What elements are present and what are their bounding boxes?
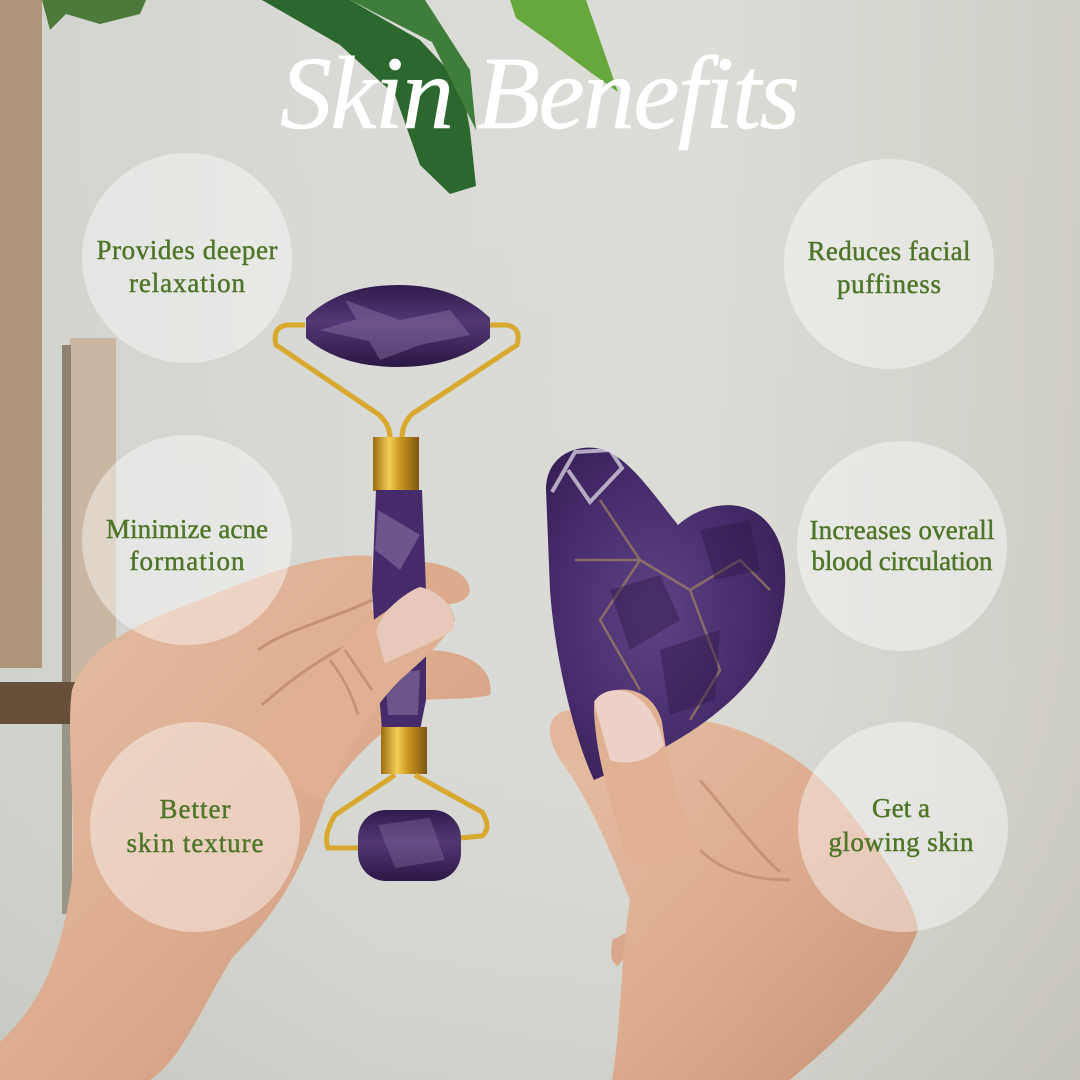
finger crease: [258, 600, 372, 705]
title: Skin Benefits: [280, 36, 800, 151]
benefit circle: Increases overall blood circulation: blood circulation: [812, 546, 993, 576]
wooden shelf: [0, 682, 76, 724]
benefit circle: Increases overall blood circulation: [797, 441, 1007, 651]
stone veins: [575, 500, 770, 720]
gua sha stone: [546, 448, 785, 866]
palm crease: [700, 780, 790, 880]
roller frame top: [275, 325, 518, 438]
right hand: [550, 690, 918, 1080]
index fingertip: [425, 562, 470, 605]
benefit circle: Better skin texture: Better: [160, 794, 230, 824]
palm and forearm: [0, 556, 491, 1080]
thumb over handle: [250, 593, 455, 800]
stone white band: [552, 450, 622, 502]
roller stone top: [306, 285, 490, 367]
thumb creases: [330, 650, 372, 715]
left hand: [0, 556, 491, 1080]
benefit circle: Get a glowing skin: glowing skin: [828, 827, 974, 857]
benefit circle: Provides deeper relaxation: relaxation: [129, 268, 246, 298]
benefit circle: Better skin texture: skin texture: [126, 828, 264, 858]
roller stone bottom: [358, 810, 461, 881]
foliage: [42, 0, 618, 194]
benefit circle: Minimize acne formation: Minimize acne: [106, 514, 268, 544]
collar top: [373, 437, 419, 491]
hand body: [560, 690, 918, 1080]
benefit circle: Reduces facial puffiness: puffiness: [837, 269, 941, 299]
benefit circle: Minimize acne formation: formation: [130, 546, 245, 576]
benefit circle: Provides deeper relaxation: [82, 153, 292, 363]
jade roller: [250, 285, 518, 881]
benefit circle: Reduces facial puffiness: [784, 159, 994, 369]
benefit circle: Minimize acne formation: [82, 435, 292, 645]
thumb nail: [594, 690, 664, 763]
thumb over gua sha: [594, 689, 700, 866]
lower finger: [611, 932, 630, 966]
roller frame bottom: [327, 775, 487, 848]
stone patches: [610, 520, 760, 715]
collar bottom: [381, 727, 427, 774]
thumb nail: [376, 587, 454, 664]
benefit circle: Reduces facial puffiness: Reduces facial: [808, 236, 970, 266]
benefit circle: Get a glowing skin: Get a: [872, 793, 930, 823]
benefit circle: Increases overall blood circulation: Increases overall: [810, 515, 994, 545]
handle: [372, 490, 426, 730]
benefit circle: Get a glowing skin: [798, 722, 1008, 932]
benefit circle: Provides deeper relaxation: Provides deeper: [96, 235, 278, 265]
left beige panel: [0, 0, 42, 668]
small fingertip: [550, 710, 600, 800]
benefit circle: Better skin texture: [90, 722, 300, 932]
wooden stick: [70, 338, 116, 683]
